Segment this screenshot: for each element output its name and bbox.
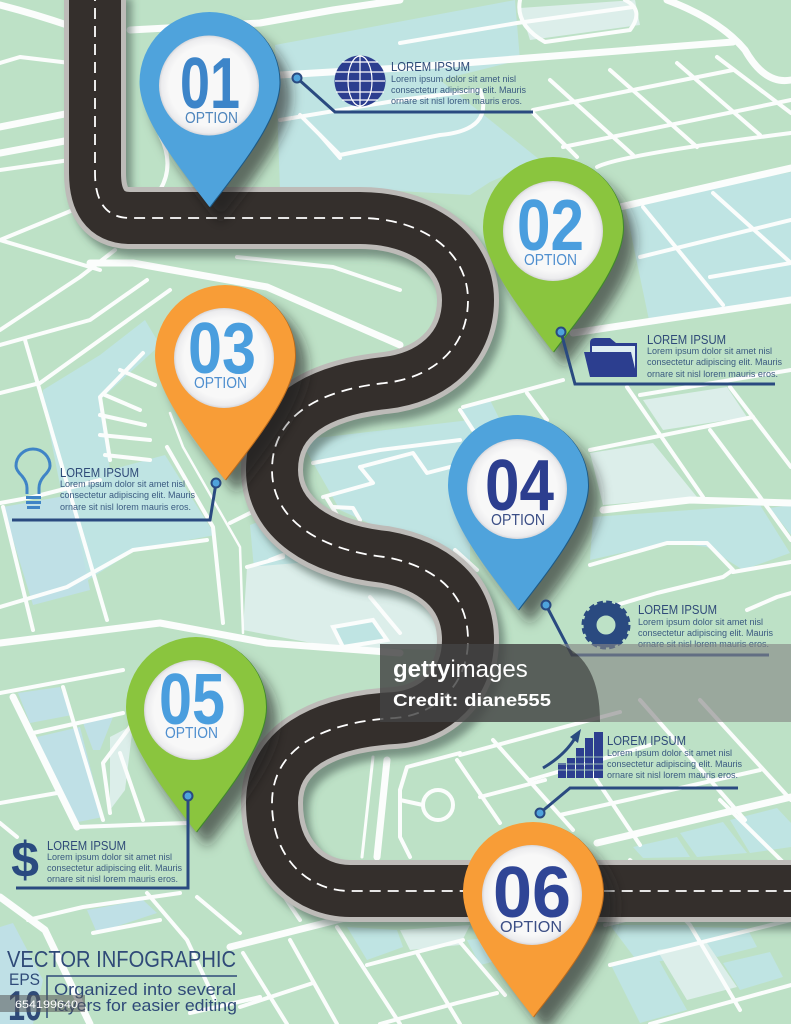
callout 02 [556,328,782,384]
callout text: consectetur adipiscing elit. Mauris [391,85,526,96]
callout text: LOREM IPSUM [607,734,686,748]
connector line [12,483,216,520]
pin 01 [140,12,291,222]
callout text: LOREM IPSUM [60,466,139,480]
callout text: Lorem ipsum dolor sit amet nisl [647,346,772,357]
callout text: LOREM IPSUM [647,333,726,347]
callout text [391,60,526,107]
number 01: 01 [180,44,240,124]
callout text: Lorem ipsum dolor sit amet nisl [47,852,172,863]
title block [7,946,237,1024]
eps label: EPS [9,970,40,989]
pin 02 [483,157,635,367]
number 03: 03 [188,309,256,389]
connector line [297,78,533,112]
callout 03 [12,449,220,520]
option label: OPTION [524,252,577,269]
callout text [638,603,773,650]
number 04: 04 [485,446,554,526]
callout text: LOREM IPSUM [391,60,470,74]
icon: bar chart with arrow [543,729,603,778]
callout text: ornare sit nisl lorem mauris eros. [47,874,178,885]
title: VECTOR INFOGRAPHIC [7,946,236,972]
connector dot [292,74,302,82]
connector line [16,796,188,888]
small teal block [333,620,387,647]
road [95,0,791,899]
pin 04 [448,415,600,624]
connector dot [184,792,192,800]
number 02: 02 [517,186,584,266]
callout text: ornare sit nisl lorem mauris eros. [647,369,778,380]
icon: dollar sign: $ [11,832,39,888]
callout text: ornare sit nisl lorem mauris eros. [60,502,191,513]
callout text: consectetur adipiscing elit. Mauris [607,759,742,770]
pin 05 [126,637,277,847]
callout 04 [542,600,773,655]
icon: folder [584,338,637,377]
connector line [546,605,769,655]
callout text: consectetur adipiscing elit. Mauris [60,490,195,501]
option label: OPTION [500,919,562,936]
connector dot [556,328,566,336]
callout text [60,466,195,513]
connector dot [212,478,220,488]
connector line [540,788,738,813]
option label: OPTION [165,725,218,742]
icon: light bulb [16,449,50,509]
callout text: ornare sit nisl lorem mauris eros. [391,96,522,107]
connector line [561,332,775,384]
option label: OPTION [185,110,238,127]
subtitle: Organized into several [54,980,236,999]
icon: globe [334,56,386,106]
callout text: consectetur adipiscing elit. Mauris [647,357,782,368]
image id tag [0,995,85,1012]
connector dot [536,808,544,818]
pin 03 [155,285,307,493]
title block: layers for easier editing [54,996,237,1015]
callout text [47,839,182,885]
watermark credit: Credit: diane555 [393,690,551,710]
image id tag: 654199640 [15,999,78,1011]
callout 05 [11,792,192,888]
connector dot [542,600,550,610]
watermark logo: gettyimages [393,656,528,683]
option label: OPTION [194,375,247,392]
watermark band [380,644,791,722]
callout text: LOREM IPSUM [638,603,717,617]
callout text: Lorem ipsum dolor sit amet nisl [638,617,763,628]
callout text [647,333,782,380]
callout 06 [536,729,742,818]
pin 06 [463,822,616,1024]
callout text: LOREM IPSUM [47,839,126,853]
callout text [607,734,742,781]
callout text: consectetur adipiscing elit. Mauris [47,863,182,874]
callout text: consectetur adipiscing elit. Mauris [638,628,773,639]
callout text: ornare sit nisl lorem mauris eros. [638,639,769,650]
number 06: 06 [493,853,571,933]
callout text: Lorem ipsum dolor sit amet nisl [391,74,516,85]
callout text: Lorem ipsum dolor sit amet nisl [607,748,732,759]
option label: OPTION [491,512,545,529]
callout 01 [292,56,533,112]
number 05: 05 [159,660,225,740]
callout text: ornare sit nisl lorem mauris eros. [607,770,738,781]
icon: gear [584,603,628,647]
callout text: Lorem ipsum dolor sit amet nisl [60,479,185,490]
